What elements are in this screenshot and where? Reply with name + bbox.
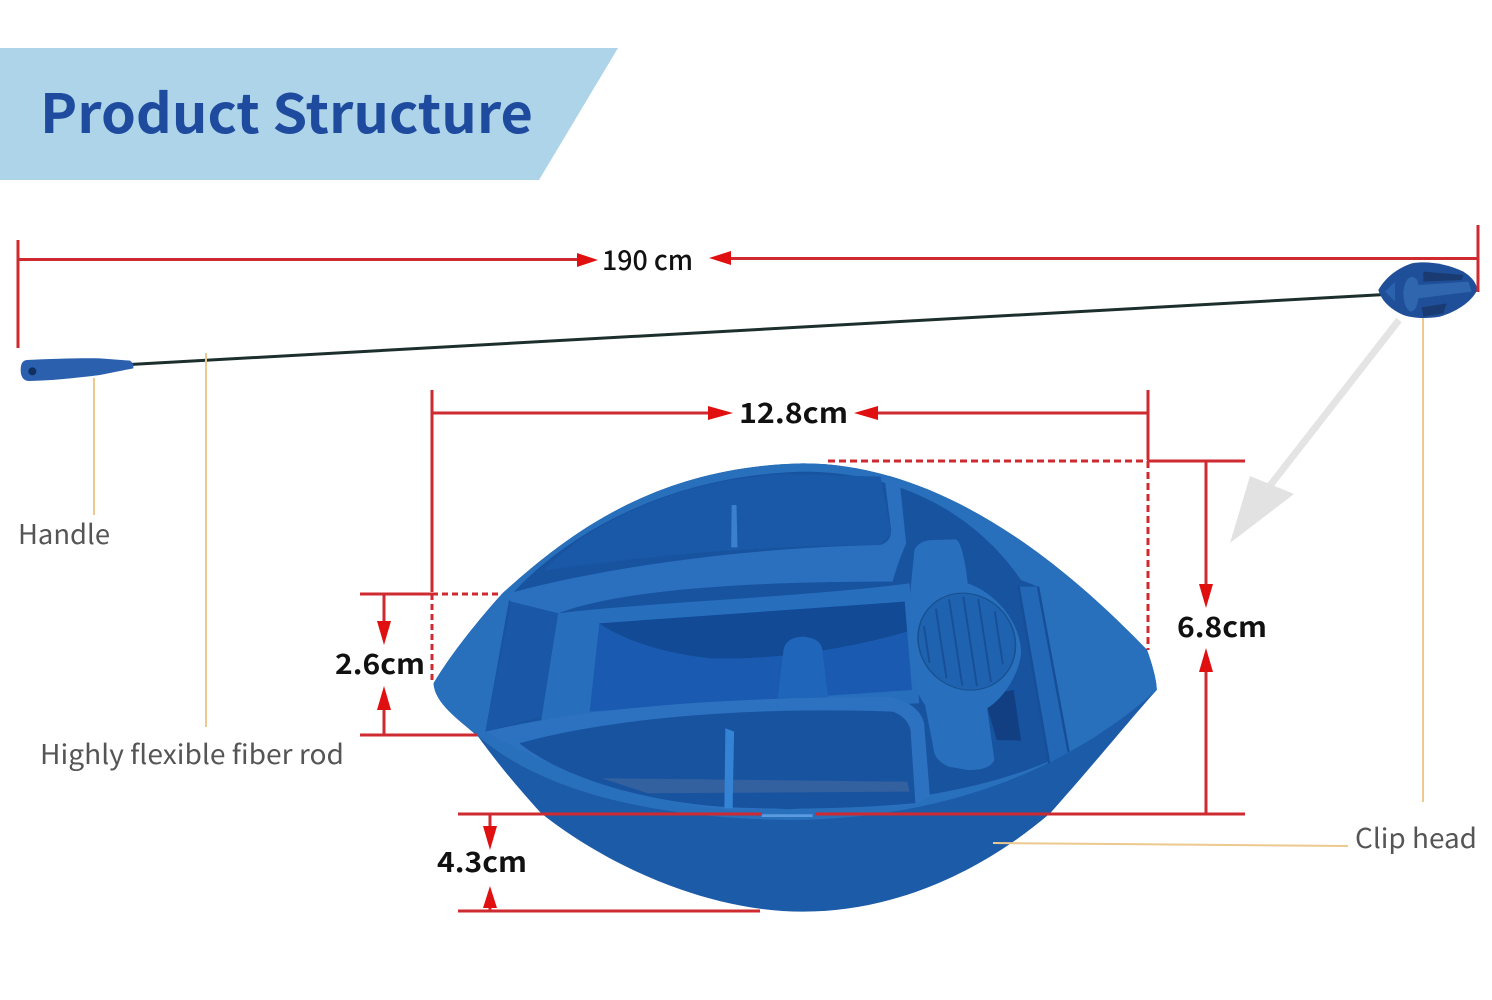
lower compartment wall (485, 697, 930, 810)
top face and rim (434, 463, 1157, 820)
T handle (909, 539, 1021, 770)
dimension: overall length 190 cm (18, 225, 1478, 348)
center frame (541, 583, 919, 720)
inner cavity (485, 472, 1069, 809)
left wall (485, 602, 558, 732)
title: Product Structure (40, 70, 533, 149)
title banner (0, 48, 618, 180)
lower divider (724, 728, 734, 808)
lower floor strip (602, 778, 910, 793)
upper compartment floor (544, 474, 891, 571)
handle (21, 358, 133, 381)
label: clip head: Clip head (1355, 817, 1477, 856)
front lip highlight (762, 812, 813, 820)
dimension: 4.3cm: 4.3cm (437, 841, 527, 881)
dimension: 2.6cm: 2.6cm (335, 643, 425, 683)
lower compartment floor (519, 710, 915, 809)
zoom arrow (1230, 320, 1399, 543)
large clip head (434, 463, 1157, 912)
label: fiber rod: Highly flexible fiber rod (40, 733, 344, 772)
dimension: width 12.8cm (432, 390, 1148, 592)
upper divider (731, 505, 737, 547)
ridged disc (911, 590, 1022, 694)
dimension: overall length 190 cm: 190 cm (602, 239, 693, 278)
label: handle: Handle (18, 513, 110, 552)
center opening (590, 602, 912, 712)
right dark pocket (924, 690, 1021, 741)
leader lines (94, 318, 1423, 846)
fiber rod (130, 294, 1385, 364)
bowl silhouette (434, 463, 1157, 912)
dimension: 2.6cm (335, 594, 500, 735)
right rail floor (1019, 587, 1069, 763)
dimension: height 6.8cm: 6.8cm (1177, 606, 1267, 646)
opening shadow (599, 602, 907, 659)
dimension: width 12.8cm: 12.8cm (739, 392, 848, 432)
dimension: height 6.8cm (815, 461, 1267, 814)
upper compartment wall (503, 476, 906, 613)
dimension: 4.3cm (437, 814, 762, 911)
pin (778, 637, 828, 698)
small clip head (1378, 262, 1477, 318)
